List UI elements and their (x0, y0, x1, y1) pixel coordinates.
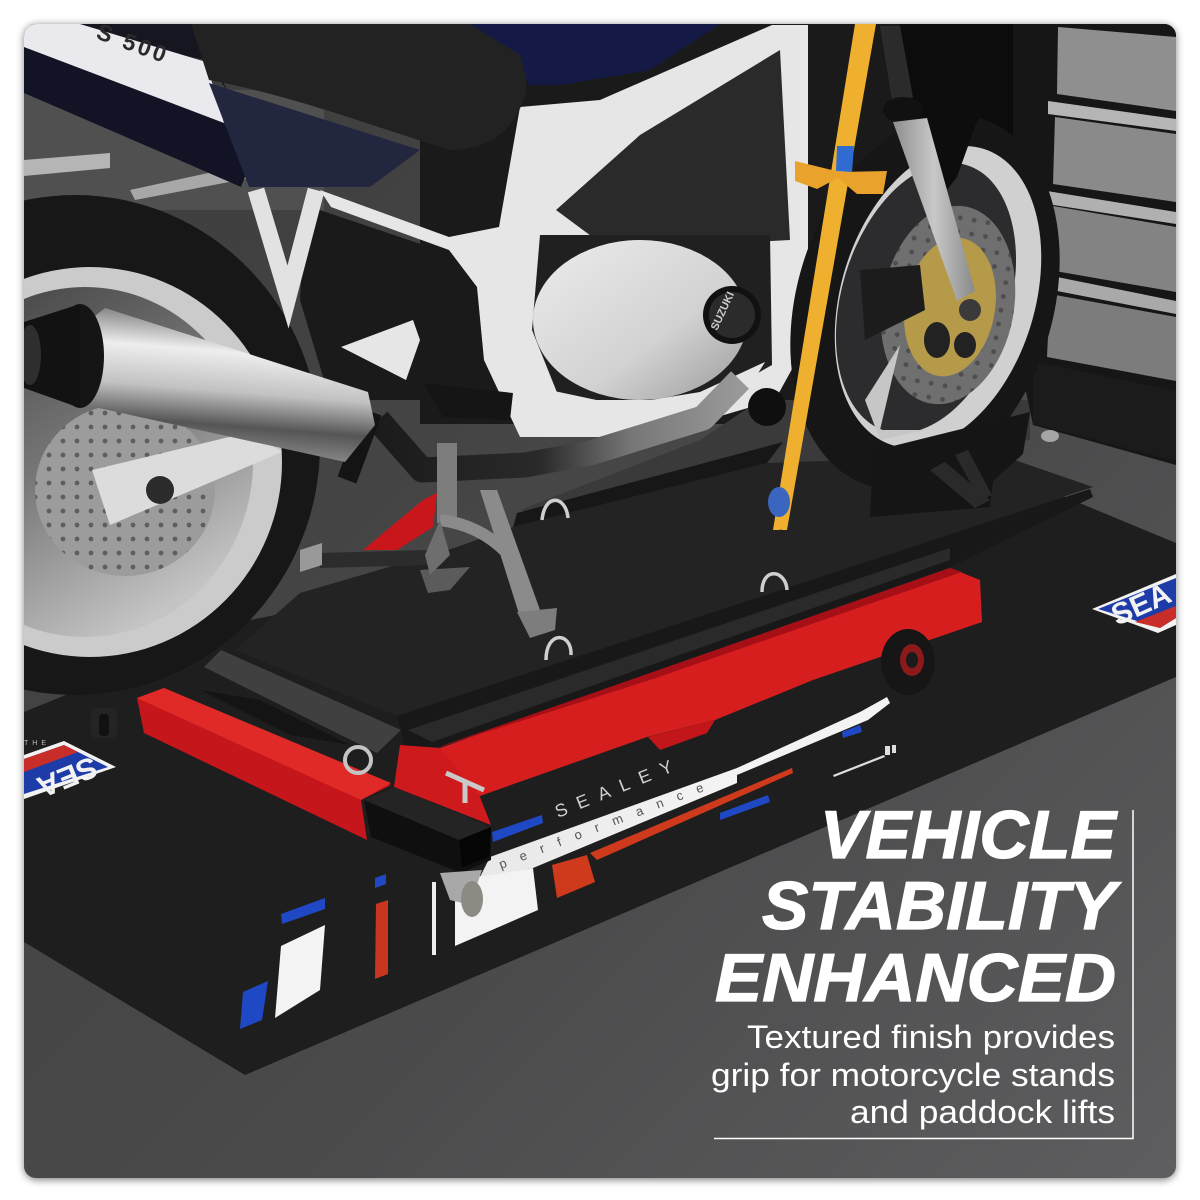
front wheel (790, 118, 1060, 486)
engine fins (556, 50, 790, 250)
engine dark surround (532, 235, 772, 400)
pin with ring (345, 747, 484, 803)
black knob (748, 388, 786, 426)
frame main structure (320, 25, 808, 437)
engine cover (533, 240, 761, 400)
floor mat (24, 470, 1176, 1075)
mat logo left (24, 741, 116, 803)
mat wordmark performance: performance (497, 780, 706, 872)
headline: VEHICLE (820, 797, 1119, 873)
lift deck (204, 442, 1093, 753)
wheel chock (870, 412, 1030, 517)
exhaust silencer (19, 304, 375, 462)
description text: grip for motorcycle stands (711, 1057, 1115, 1093)
lift wheel (881, 629, 935, 695)
rear caster (99, 714, 109, 736)
lift red frame (137, 568, 982, 840)
caster wheel (440, 870, 483, 917)
frame subframe V struts (256, 190, 316, 297)
mat logo right: SEA (1106, 577, 1176, 632)
exhaust downpipe (378, 380, 740, 470)
front fork (880, 26, 981, 321)
tail fairing: S 500 (93, 18, 173, 68)
background behind the bike (24, 24, 1030, 520)
lower white frame (556, 362, 765, 400)
description text: Textured finish provides (747, 1019, 1115, 1055)
front fender (928, 115, 979, 190)
lift tube handle (364, 787, 491, 873)
mat stripes (240, 697, 896, 1029)
mat small label: THE (24, 740, 50, 747)
text frame rule (714, 810, 1133, 1138)
exhaust bracket (347, 412, 372, 480)
deck U-bolts (542, 500, 787, 660)
tail fairing (24, 18, 420, 187)
fuel tank (470, 24, 720, 85)
red lift arm behind stand (363, 493, 437, 550)
engine cover: SUZUKI (709, 290, 737, 332)
centre stand (300, 443, 557, 638)
description text (711, 1019, 1115, 1130)
tool cabinet (900, 24, 1176, 465)
under-seat hardware (435, 150, 495, 205)
footrest (498, 391, 513, 417)
mat logo left: SEA (32, 750, 102, 803)
headline: STABILITY (762, 868, 1122, 944)
frame dark interior (300, 210, 420, 400)
rear wheel (0, 195, 320, 695)
ratchet strap (762, 24, 887, 590)
headline (715, 797, 1122, 1016)
description text: and paddock lifts (850, 1094, 1115, 1130)
headline: ENHANCED (715, 940, 1116, 1016)
mat wordmark SEALEY: SEALEY (552, 756, 675, 822)
seat (191, 24, 526, 150)
